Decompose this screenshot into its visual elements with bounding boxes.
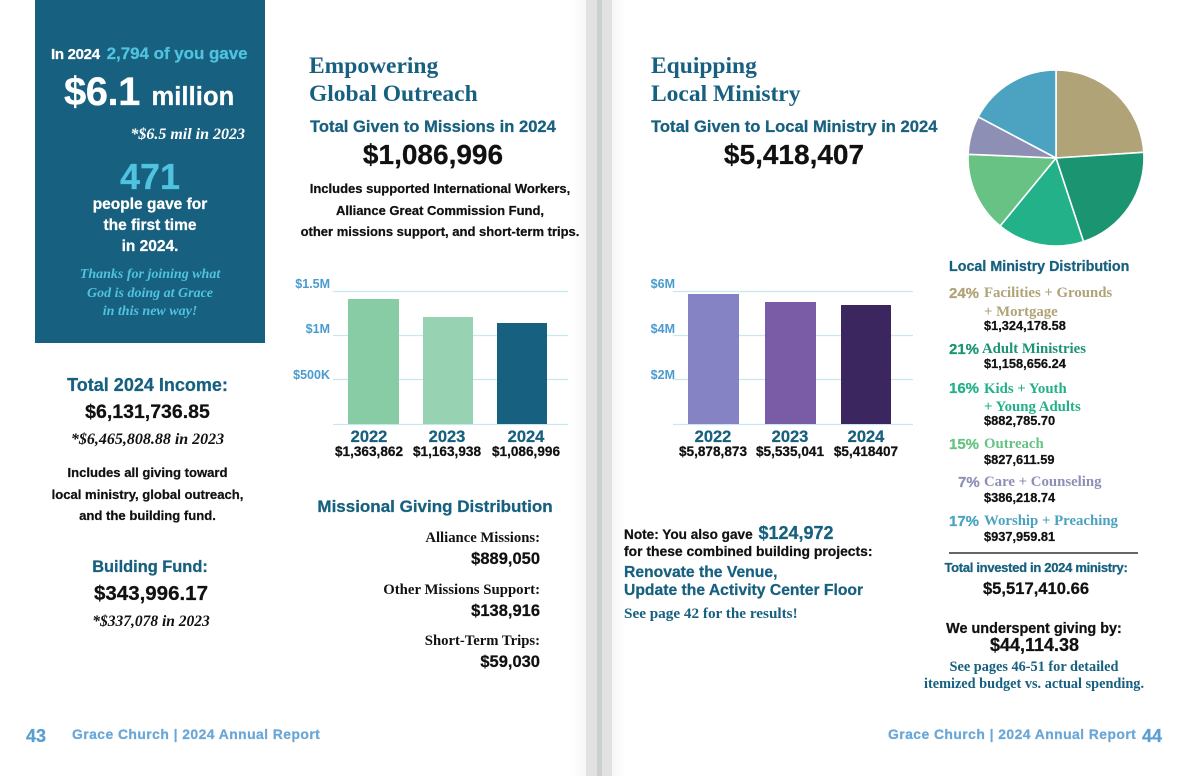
legend heading: Local Ministry Distribution	[949, 259, 1129, 275]
item: kids and youth: $882,785.70	[984, 413, 1055, 428]
prior year total: *$6.5 mil in 2023	[130, 126, 245, 143]
bar values: $5,535,041	[756, 444, 824, 459]
slice: worship	[978, 70, 1056, 158]
local total label: Total Given to Local Ministry in 2024	[651, 117, 937, 136]
footer right	[888, 726, 1162, 746]
item: facilities: $1,324,178.58	[984, 318, 1066, 333]
missions total amount: $1,086,996	[363, 139, 503, 170]
budget reference	[924, 659, 1144, 692]
page number 43: 43	[26, 726, 46, 746]
bar 2023	[423, 317, 473, 424]
thanks message: God is doing at Grace	[87, 286, 213, 301]
item: worship: 17%	[949, 513, 979, 530]
heading: local ministry	[651, 53, 800, 107]
underspent label: We underspent giving by:	[946, 621, 1122, 637]
report name: Grace Church | 2024 Annual Report	[888, 726, 1136, 742]
item: outreach: Outreach	[984, 436, 1044, 452]
heading: global outreach: Empowering	[309, 53, 438, 79]
alliance missions: Alliance Missions:	[425, 530, 540, 546]
bar values	[679, 444, 898, 459]
year labels: 2023	[772, 428, 808, 446]
item: worship: Worship + Preaching	[984, 513, 1118, 529]
underspent note	[924, 621, 1144, 692]
item: kids and youth: Kids + Youth	[984, 381, 1067, 397]
panel: giving summary	[35, 0, 265, 343]
bar chart: missions giving	[293, 277, 568, 459]
income prior year: *$6,465,808.88 in 2023	[71, 431, 224, 448]
year labels: 2022	[695, 428, 731, 446]
slice: kids and youth	[1000, 158, 1084, 246]
heading: global outreach	[309, 53, 478, 107]
page spine	[572, 0, 626, 776]
income heading: Total 2024 Income:	[67, 375, 228, 395]
bar values: $1,086,996	[492, 444, 560, 459]
bar values: $1,163,938	[413, 444, 481, 459]
year labels: 2022	[351, 428, 387, 446]
item: facilities: + Mortgage	[984, 304, 1058, 320]
item: kids and youth: + Young Adults	[984, 399, 1081, 415]
heading: local ministry: Local Ministry	[651, 81, 800, 107]
income amount: $6,131,736.85	[85, 401, 210, 423]
item: outreach: $827,611.59	[984, 452, 1054, 467]
results reference: See page 42 for the results!	[624, 605, 798, 622]
bar 2023	[765, 302, 816, 424]
project names	[624, 564, 863, 599]
item: care: 7%	[958, 474, 980, 491]
missional distribution list: $889,050	[471, 550, 540, 568]
footer left	[26, 726, 320, 746]
bar 2022	[348, 299, 399, 424]
income note	[52, 465, 243, 523]
bar chart: local ministry giving	[650, 277, 913, 459]
first time givers text: in 2024.	[122, 238, 178, 255]
y axis labels	[293, 277, 330, 382]
slice: adult ministries	[1056, 152, 1144, 242]
item: worship	[949, 513, 1118, 544]
project names: Update the Activity Center Floor	[624, 582, 863, 599]
item: kids and youth: 16%	[949, 380, 979, 397]
slice: facilities	[1056, 70, 1144, 158]
invested label: Total invested in 2024 ministry:	[944, 560, 1128, 575]
budget reference: See pages 46-51 for detailed	[950, 659, 1118, 675]
item: adult ministries: Adult Ministries	[982, 341, 1086, 357]
item: outreach: 15%	[949, 436, 979, 453]
heading: missional distribution: Missional Giving Distribution	[317, 497, 553, 516]
total given: $6.1 million	[64, 70, 234, 114]
item: care: $386,218.74	[984, 490, 1055, 505]
note text: for these combined building projects:	[624, 543, 873, 559]
block: total income	[52, 375, 243, 523]
building fund heading: Building Fund:	[92, 558, 208, 576]
bar values: $5,878,873	[679, 444, 747, 459]
first time givers text	[93, 196, 208, 255]
heading: local ministry: Equipping	[651, 53, 757, 79]
note amount: Note: You also gave $124,972	[624, 523, 834, 543]
item: kids and youth	[949, 380, 1081, 428]
y axis labels: $6M	[651, 277, 675, 291]
bar values: $5,418407	[834, 444, 898, 459]
building fund prior year: *$337,078 in 2023	[92, 613, 210, 630]
first time givers text: the first time	[103, 217, 196, 234]
y axis labels: $1M	[306, 322, 330, 336]
item: worship: $937,959.81	[984, 529, 1055, 544]
bar values: $1,363,862	[335, 444, 403, 459]
bar 2024	[841, 305, 891, 424]
missions note: Alliance Great Commission Fund,	[336, 202, 544, 218]
income note: and the building fund.	[79, 508, 216, 523]
underspent amount: $44,114.38	[990, 635, 1079, 655]
budget reference: itemized budget vs. actual spending.	[924, 676, 1144, 692]
y axis labels: $2M	[651, 368, 675, 382]
year labels: 2024	[508, 428, 545, 446]
bar 2022	[688, 294, 739, 424]
bar 2024	[497, 323, 547, 424]
building fund amount: $343,996.17	[94, 582, 208, 605]
missions note: other missions support, and short-term trips.	[301, 224, 579, 239]
missions total label: Total Given to Missions in 2024	[310, 117, 556, 136]
item: outreach	[949, 436, 1054, 467]
year labels	[351, 428, 545, 446]
item: care	[958, 474, 1102, 505]
local total amount: $5,418,407	[724, 139, 864, 170]
invested total	[944, 560, 1128, 598]
slice: outreach	[968, 154, 1056, 226]
missions note: Includes supported International Workers,	[310, 181, 570, 196]
first time givers text: people gave for	[93, 196, 207, 213]
missional distribution list: $59,030	[480, 653, 540, 671]
year labels: 2023	[429, 428, 465, 446]
item: facilities	[949, 285, 1112, 333]
heading: global outreach: Global Outreach	[309, 81, 478, 107]
slice: care	[968, 117, 1056, 158]
year labels: 2024	[848, 428, 885, 446]
missional distribution list: $138,916	[471, 602, 540, 620]
year labels	[695, 428, 885, 446]
project names: Renovate the Venue,	[624, 564, 777, 581]
giver count: In 2024 2,794 of you gave	[51, 44, 248, 63]
thanks message	[80, 267, 221, 319]
report name: Grace Church | 2024 Annual Report	[72, 726, 320, 742]
item: adult ministries: $1,158,656.24	[984, 356, 1066, 371]
block: building fund	[92, 558, 210, 630]
legend: local ministry distribution	[949, 259, 1129, 544]
y axis labels: $4M	[651, 322, 675, 336]
missional distribution list	[383, 530, 540, 671]
y axis labels	[651, 277, 675, 382]
invested amount: $5,517,410.66	[983, 579, 1089, 598]
page number 44: 44	[1142, 726, 1162, 746]
other missions: Other Missions Support:	[383, 582, 540, 598]
y axis labels: $1.5M	[295, 277, 330, 291]
item: facilities: 24%	[949, 285, 979, 302]
item: care: Care + Counseling	[984, 474, 1102, 490]
thanks message: in this new way!	[103, 304, 197, 319]
missions note	[301, 181, 579, 239]
item: facilities: Facilities + Grounds	[984, 285, 1112, 301]
income note: Includes all giving toward	[67, 465, 228, 480]
short-term trips: Short-Term Trips:	[425, 633, 540, 649]
y axis labels: $500K	[293, 368, 330, 382]
first time givers number: 471	[120, 156, 180, 197]
item: adult ministries	[949, 341, 1086, 371]
item: adult ministries: 21%	[949, 341, 979, 358]
income note: local ministry, global outreach,	[52, 486, 243, 502]
bar values	[335, 444, 560, 459]
note: building projects	[624, 523, 873, 622]
pie chart: local ministry distribution	[968, 70, 1144, 246]
thanks message: Thanks for joining what	[80, 267, 220, 282]
